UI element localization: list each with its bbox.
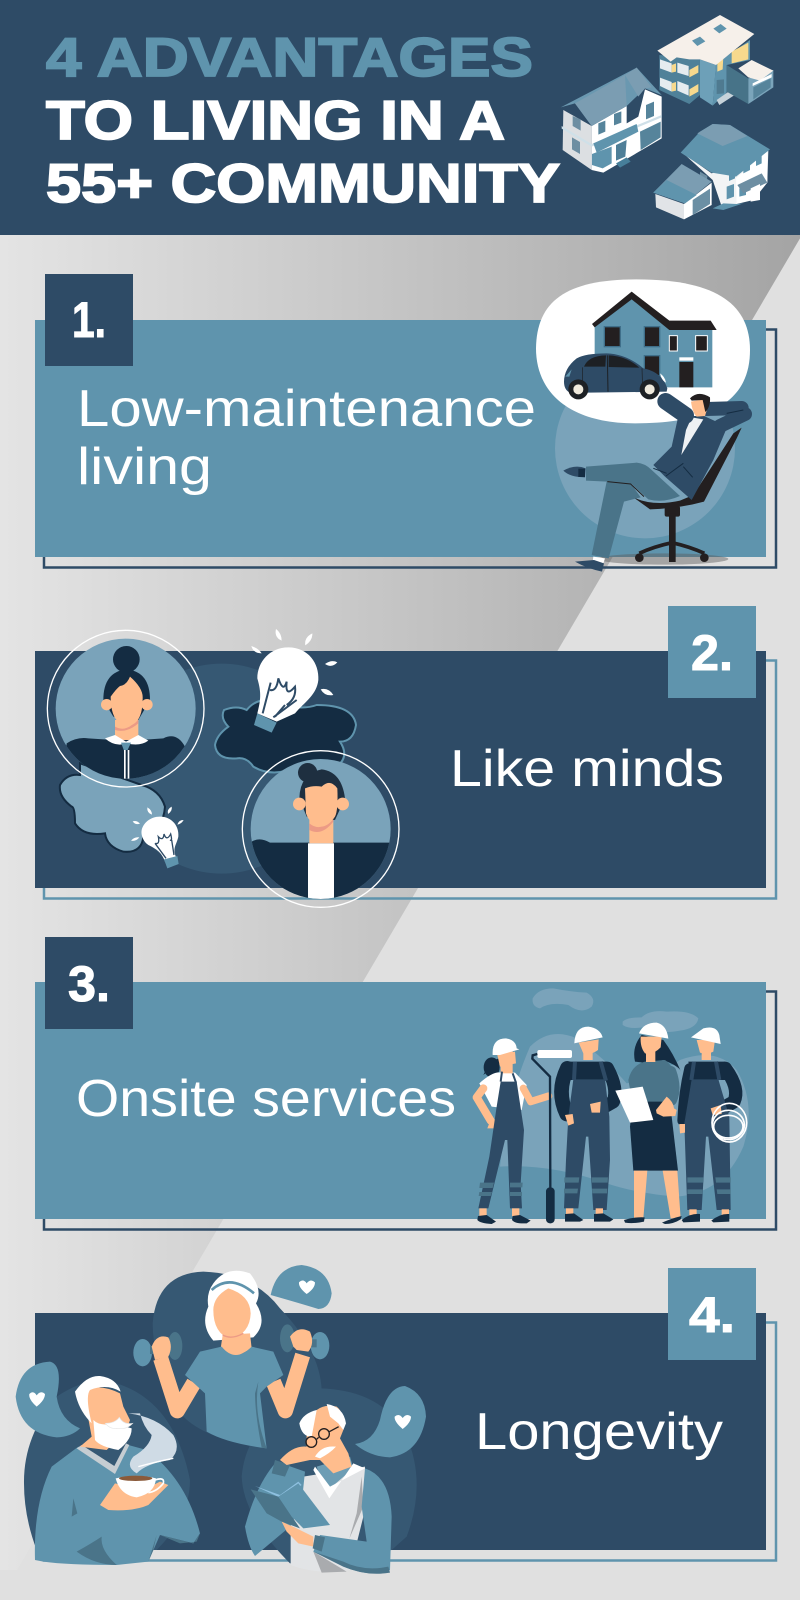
number 4: 4. [689,1287,735,1343]
heart bubble: right [355,1386,426,1457]
backdrop disc [117,664,327,874]
portrait: woman [47,630,204,787]
illustration: two people sharing ideas [47,629,399,907]
large light bulb [251,629,337,733]
heading: Low-maintenance living: living [77,438,212,496]
heading: Onsite services: Onsite services [76,1070,456,1128]
worker: man with cable [679,1027,747,1222]
panel 3 fill [35,982,766,1219]
portrait: man [242,751,399,907]
house: two-storey with garage [653,124,770,219]
panel 3 outline [44,992,776,1230]
number 1 [45,274,133,366]
header band [0,0,800,235]
panel 3: onsite services [35,937,776,1230]
panel 1 fill [35,320,766,557]
worker: man centre [561,1027,615,1222]
worker: woman supervisor [615,1023,682,1224]
heading: Low-maintenance living: Low-maintenance [77,380,536,438]
light thought cloud [60,763,165,852]
small light bulb [131,807,184,868]
thought bubble [536,279,750,423]
number 1: 1. [72,292,106,348]
title: 4 ADVANTAGES [46,26,533,88]
panel 2 fill [35,651,766,888]
worker: woman with roller [477,1038,549,1224]
senior: man with coffee [35,1376,200,1565]
icon: three isometric houses [561,15,773,219]
backdrop blobs [24,1272,417,1563]
panel 4 outline [44,1322,776,1560]
illustration: active seniors [16,1265,426,1574]
paint roller [532,1050,572,1223]
number 2: 2. [691,625,733,681]
house: gabled family home [561,68,662,173]
number 2 [668,606,756,698]
man relaxing [563,394,745,572]
dream house [592,292,717,387]
backdrop circle [555,358,735,538]
number 3: 3. [68,956,110,1012]
number 3 [45,937,133,1029]
number 4 [668,1268,756,1360]
senior: woman with dumbbells [133,1271,329,1448]
panel 4 fill [35,1313,766,1550]
panel 4: longevity [35,1268,776,1560]
panel 1: low-maintenance living [35,274,776,568]
panel 2: like minds [35,606,776,898]
office chair [633,428,742,562]
heart bubble: left [16,1362,80,1437]
floor shadow [598,553,728,565]
senior: man reading [245,1404,392,1574]
backdrop shapes [500,988,749,1197]
illustration: man dreaming of house and car [536,279,750,572]
title [46,26,560,214]
title: TO LIVING IN A [46,89,505,151]
heading: Longevity: Longevity [475,1403,723,1461]
dream car [564,353,667,399]
panel 1 outline [44,330,776,568]
panel 2 outline [44,660,776,898]
heart bubble: top [271,1265,332,1309]
heading: Like minds: Like minds [450,740,724,798]
illustration: service workers [477,988,749,1224]
title: 55+ COMMUNITY [46,152,560,214]
dark thought cloud [215,700,356,772]
house: flat-roof modern [657,15,773,106]
